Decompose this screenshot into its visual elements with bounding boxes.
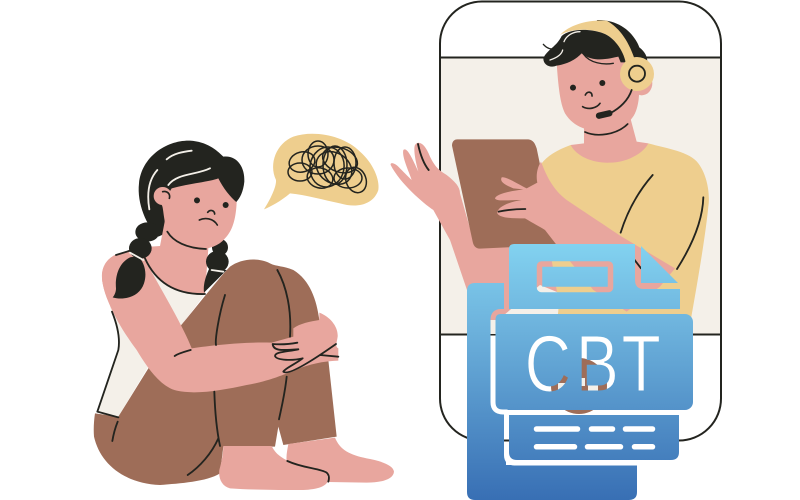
girl: trousers (94, 260, 337, 485)
girl: face (162, 178, 237, 249)
man: hair details (543, 44, 613, 64)
man: ear (639, 81, 652, 96)
girl: neck and shoulder (102, 220, 208, 327)
tangled scribble (287, 141, 370, 196)
girl: feet (219, 438, 394, 490)
man: microphone (599, 90, 632, 116)
man: face (557, 50, 639, 132)
girl: hair highlights (130, 151, 223, 272)
man: neck (571, 117, 648, 163)
girl: facial features (163, 191, 229, 225)
man: hand lines (418, 144, 525, 212)
girl: back hair (139, 141, 244, 237)
girl: finger lines (273, 343, 338, 372)
man: tablet (452, 139, 557, 249)
icon: folded corner (641, 246, 678, 283)
man: hair (543, 30, 626, 67)
phone frame (440, 2, 721, 440)
man: cream space under arm (490, 285, 558, 334)
man: facial features (570, 80, 628, 135)
man: near hand and forearm (495, 162, 675, 312)
icon: back sheet (467, 283, 637, 500)
man: headband (560, 20, 636, 63)
girl: tank top (97, 258, 205, 417)
man: far arm and raised hand (391, 143, 560, 320)
man: earcup (620, 57, 654, 91)
icon: title card (495, 314, 693, 410)
man: headband back (597, 20, 647, 65)
girl sitting (94, 141, 394, 490)
girl: outline strokes (97, 232, 329, 482)
girl: arm wrapped around knees (102, 252, 338, 392)
man: shirt fold lines (621, 175, 703, 269)
brown shape behind icon (551, 358, 607, 414)
icon: top page (509, 244, 680, 309)
CBT document icon (467, 244, 693, 500)
girl: near braid (113, 222, 159, 299)
man: shirt (542, 143, 709, 334)
man with headset (391, 20, 709, 334)
girl: ear (154, 187, 172, 205)
girl: far braid (204, 239, 229, 293)
bubble shape (264, 134, 379, 209)
thought bubble (264, 134, 379, 209)
icon: lower text block (509, 415, 679, 460)
